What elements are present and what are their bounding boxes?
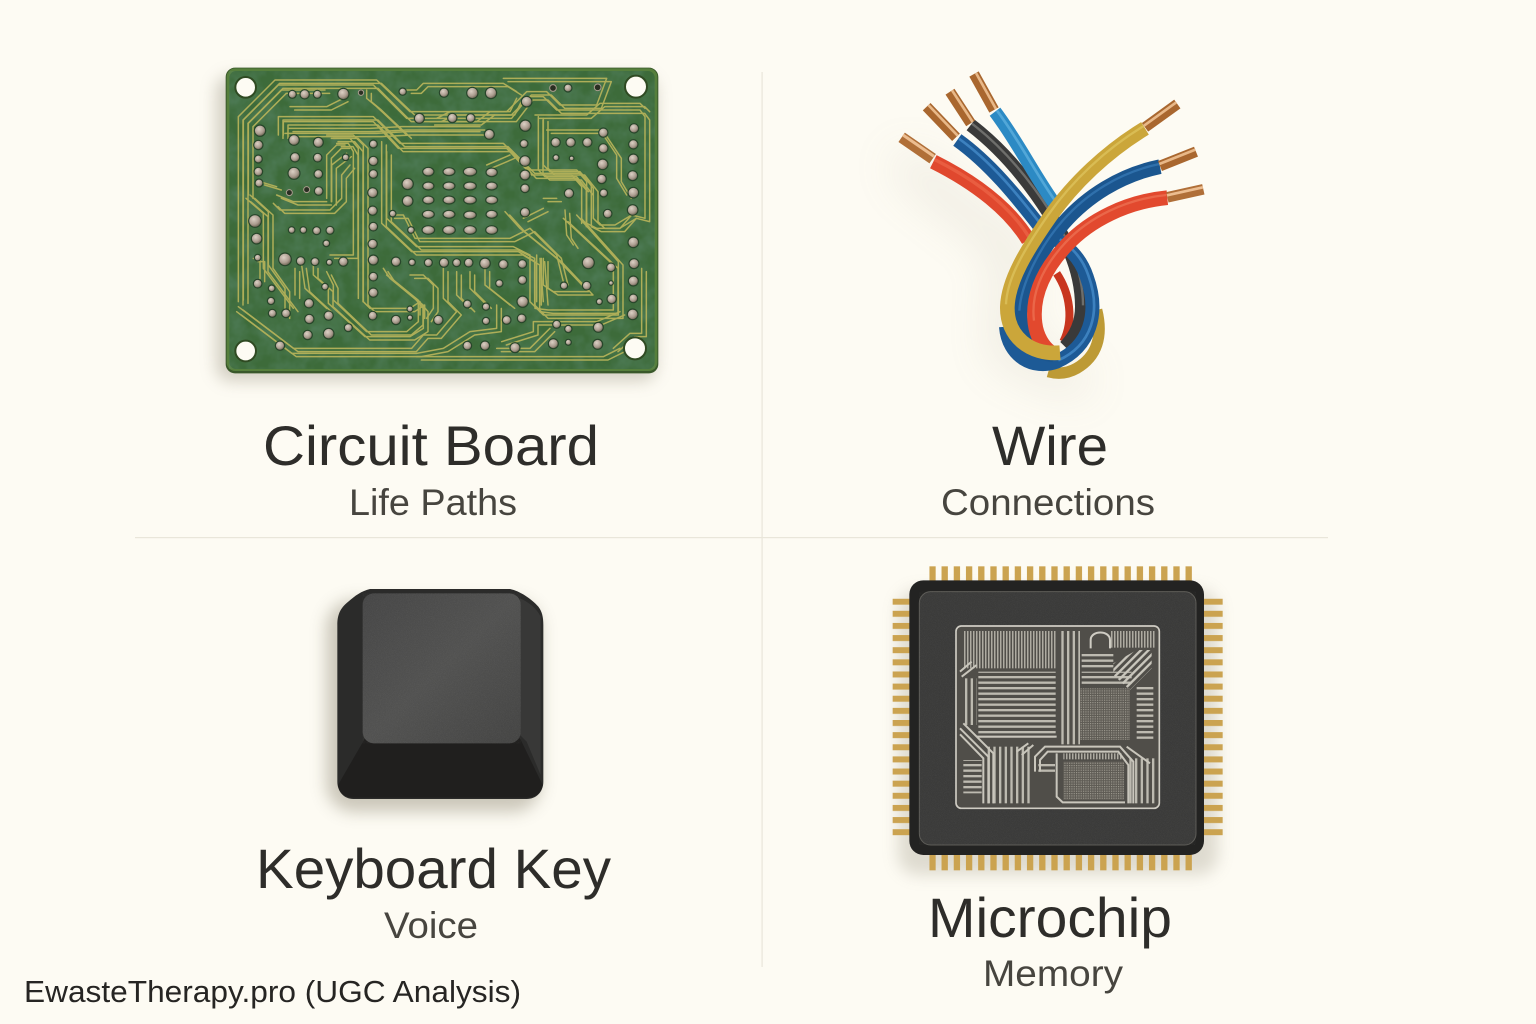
panel: microchip	[893, 566, 1223, 994]
icon: microchip	[893, 566, 1223, 870]
copper traces	[237, 78, 650, 360]
icon: circuit board	[226, 68, 658, 373]
rear yellow wire	[1048, 310, 1099, 373]
drill holes	[286, 84, 601, 196]
subheading: Voice: Voice	[384, 905, 478, 946]
die circuit plate	[956, 626, 1159, 808]
subheading: Life Paths: Life Paths	[349, 482, 517, 523]
right red wire	[1033, 187, 1203, 352]
mounting holes	[235, 76, 647, 361]
subheading: Memory: Memory	[983, 953, 1124, 994]
solder pads	[249, 84, 639, 353]
heading: Keyboard Key: Keyboard Key	[256, 837, 611, 900]
panel: keyboard key	[256, 589, 611, 946]
blue loop wire	[927, 105, 1094, 364]
wire shadow	[900, 160, 1085, 385]
chip shadow	[898, 590, 1218, 875]
panel: wire	[900, 73, 1203, 523]
subheading: Connections: Connections	[941, 482, 1155, 523]
heading: Wire: Wire	[992, 414, 1108, 477]
icon: keycap	[337, 589, 543, 799]
vertical divider	[762, 72, 763, 967]
horizontal divider	[135, 537, 1328, 538]
gold pins	[893, 566, 1223, 870]
icon: wires	[902, 73, 1203, 373]
black wire	[950, 90, 1083, 347]
circuit board shadow	[216, 76, 656, 381]
front yellow wire	[1006, 102, 1177, 353]
footer credit: EwasteTherapy.pro (UGC Analysis)	[24, 974, 521, 1009]
key shadow	[326, 600, 541, 812]
panel: circuit board	[216, 68, 658, 523]
left red wire	[902, 135, 1069, 342]
right dark blue wire	[1019, 150, 1196, 355]
heading: Circuit Board: Circuit Board	[263, 414, 599, 477]
light blue wire	[974, 73, 1059, 207]
heading: Microchip: Microchip	[928, 886, 1172, 949]
